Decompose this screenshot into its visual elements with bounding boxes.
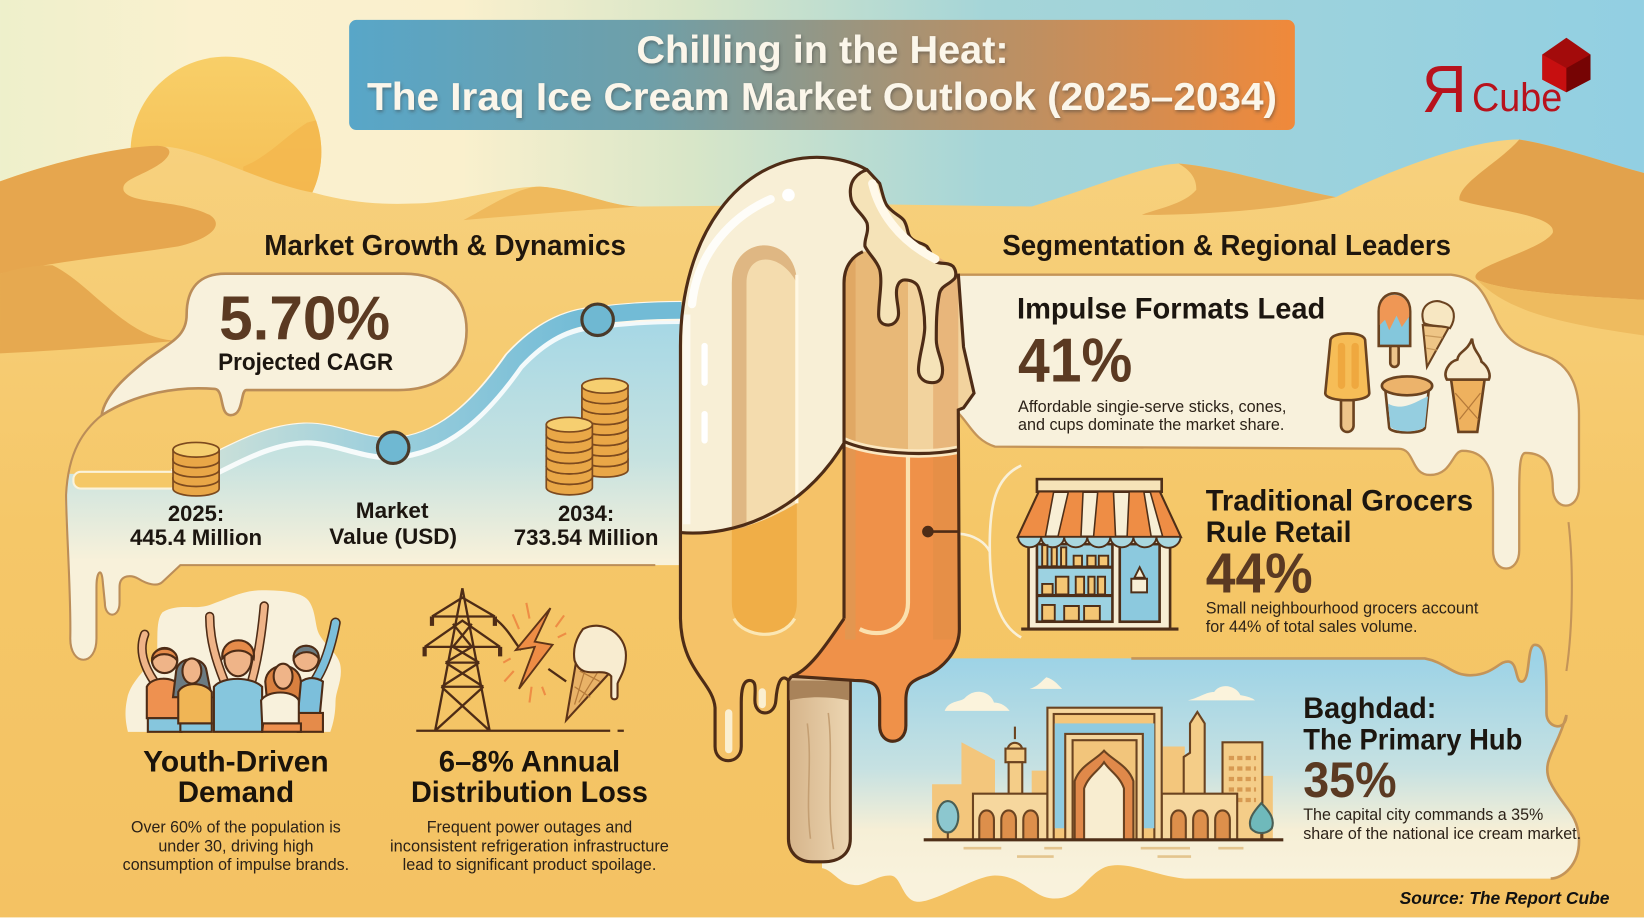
stat value: 35% (1303, 751, 1397, 808)
description: Small neighbourhood grocers account (1206, 599, 1479, 617)
icon: Baghdad skyline (924, 677, 1283, 857)
popsicle stick (788, 676, 850, 862)
description: Affordable singie-serve sticks, cones, (1018, 398, 1286, 416)
description: Over 60% of the population is (131, 818, 341, 836)
label: market value: Market (356, 498, 429, 523)
raised arms (142, 606, 336, 681)
stat heading: Traditional Grocers (1206, 485, 1473, 518)
stat heading: 6–8% Annual (439, 746, 620, 779)
description: consumption of impulse brands. (123, 856, 349, 874)
callout: CAGR bubble: Projected CAGR (218, 349, 393, 376)
panel outline (1131, 645, 1579, 879)
icon: group of young people cheering (126, 590, 341, 732)
panel: distribution loss (390, 588, 669, 874)
growth curve band (173, 312, 682, 480)
description: share of the national ice cream market. (1303, 825, 1581, 843)
label: 2034 value: 733.54 Million (514, 525, 658, 550)
icon: yellow popsicle (1325, 333, 1369, 432)
stat heading: The Primary Hub (1303, 724, 1522, 757)
panel: impulse formats (958, 275, 1579, 569)
description: for 44% of total sales volume. (1206, 618, 1418, 636)
panel outline (66, 415, 655, 660)
title banner: Chilling in the Heat: (636, 29, 1009, 72)
logo: RCube: Cube (1472, 76, 1562, 120)
description: The capital city commands a 35% (1303, 806, 1543, 824)
node 2034 (582, 304, 613, 336)
description: inconsistent refrigeration infrastructure (390, 837, 669, 855)
icon: soft serve cone (1446, 339, 1490, 432)
callout pointer dot (922, 526, 958, 537)
yellow bar start of curve (73, 472, 178, 489)
stat heading: Impulse Formats Lead (1017, 293, 1325, 326)
icon: grocery store (1018, 479, 1181, 629)
heading: Market Growth & Dynamics: Market Growth & Dynamics (264, 229, 626, 261)
callout: CAGR bubble (102, 274, 467, 415)
description: Frequent power outages and (427, 818, 632, 836)
callout: CAGR bubble: 5.70% (219, 285, 390, 354)
description: lead to significant product spoilage. (403, 856, 656, 874)
source note: Source: The Report Cube (1400, 888, 1609, 908)
label: 2034 value: 2034: (558, 501, 614, 526)
icon: sun (130, 56, 322, 192)
node 2025-2034 midpoint (377, 432, 409, 463)
chart area under the growth curve (65, 321, 682, 660)
heading: Segmentation & Regional Leaders: Segmentation & Regional Leaders (1002, 229, 1451, 261)
stat heading: Baghdad: (1303, 692, 1436, 725)
title banner (349, 20, 1295, 130)
logo: RCube: Я (1422, 52, 1467, 127)
icon: orange and blue popsicle (1379, 293, 1410, 367)
illustration: central popsicle (671, 157, 980, 862)
logo: RCube (1422, 38, 1591, 127)
panel: youth-driven demand (123, 590, 349, 874)
icon: cup (1382, 376, 1432, 432)
stat heading: Distribution Loss (411, 776, 648, 809)
label: 2025 value: 445.4 Million (130, 525, 262, 550)
right popsicle: tan and orange (786, 241, 980, 755)
icon: 2025 coin stack (173, 442, 219, 496)
icon: power pylon, lightning and melting cone (416, 588, 626, 731)
icon: 2034 coin stacks (546, 378, 628, 495)
stat heading: Rule Retail (1206, 516, 1351, 549)
title banner: The Iraq Ice Cream Market Outlook (2025–2034) (367, 76, 1277, 119)
panel: market value chart (65, 304, 682, 660)
description: and cups dominate the market share. (1018, 416, 1284, 434)
icon: ice cream cone (1422, 301, 1454, 367)
stat value: 44% (1206, 541, 1313, 604)
panel: Baghdad (822, 645, 1581, 902)
label: 2025 value: 2025: (168, 501, 224, 526)
stat heading: Youth-Driven (143, 746, 329, 779)
description: under 30, driving high (158, 837, 314, 855)
melting drip on top (850, 170, 956, 383)
stat heading: Demand (178, 776, 294, 809)
left popsicle: cream and yellow (678, 156, 868, 762)
figures (147, 640, 323, 732)
label: market value: Value (USD) (329, 524, 457, 549)
stat value: 41% (1018, 327, 1132, 396)
panel: traditional grocers outline (958, 466, 1572, 671)
